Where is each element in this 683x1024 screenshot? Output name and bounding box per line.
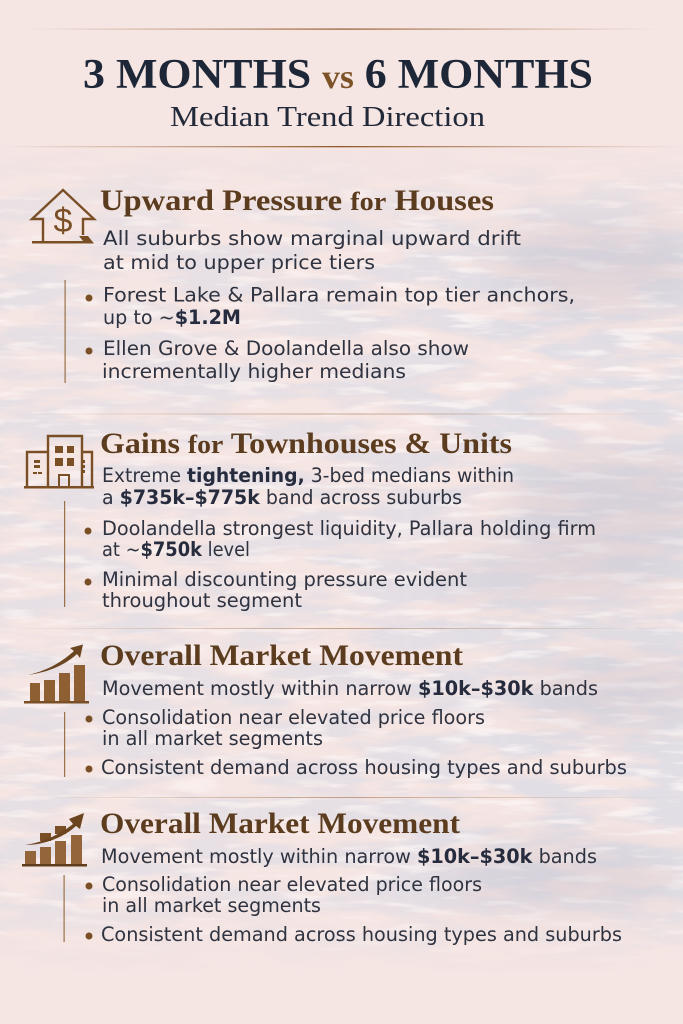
intro text: at mid to upper price tiers [103,251,375,274]
bullet list [64,706,627,779]
bullet list: in all market segments [102,894,321,917]
section: overall market movement (second) [22,807,622,946]
heading: Overall Market Movement [100,639,463,672]
bullet list [64,873,622,946]
intro text: Movement mostly within narrow $10k–$30k bands [102,677,598,700]
section: overall market movement (first) [24,639,627,779]
bullet list [64,501,596,612]
bullet list: Doolandella strongest liquidity, Pallara holding firm [102,517,596,540]
header rule [0,146,683,147]
intro text [103,227,521,274]
bullet list: in all market segments [102,727,323,750]
intro text: All suburbs show marginal upward drift [103,227,521,250]
title: 3 MONTHS vs 6 MONTHS [83,52,593,98]
intro text: Extreme tightening, 3-bed medians within [102,464,514,487]
bullet list: throughout segment [102,589,302,612]
bullet list: Consistent demand across housing types and suburbs [101,756,627,779]
icon: buildings [24,436,94,488]
bullet list: Ellen Grove & Doolandella also show [103,337,469,360]
intro text: Movement mostly within narrow $10k–$30k bands [101,845,597,868]
heading: Overall Market Movement [100,807,460,840]
subtitle: Median Trend Direction [170,102,485,133]
bullet list: at ~$750k level [102,538,250,561]
intro text: a $735k–$775k band across suburbs [102,486,462,509]
top rule [26,28,658,30]
bullet list: incrementally higher medians [102,360,406,383]
icon: house with dollar: $ [54,202,73,240]
background [0,177,683,942]
heading: Upward Pressure for Houses [100,184,494,217]
bullet list: Consistent demand across housing types and suburbs [101,923,622,946]
intro text [102,464,514,509]
icon: rising bar chart [24,644,89,704]
bullet list [64,280,575,383]
bullet list: Minimal discounting pressure evident [102,568,467,591]
bullet list: up to ~$1.2M [103,306,241,329]
bullet list: Consolidation near elevated price floors [102,706,485,729]
icon: rising bar chart with arrow [22,813,87,866]
bullet list: Consolidation near elevated price floors [102,873,482,896]
section: gains for townhouses and units [24,427,596,612]
icon: house with dollar [32,190,94,244]
section: upward pressure for houses [32,184,575,383]
bullet list: Forest Lake & Pallara remain top tier anchors, [103,284,575,306]
heading: Gains for Townhouses & Units [100,427,512,460]
